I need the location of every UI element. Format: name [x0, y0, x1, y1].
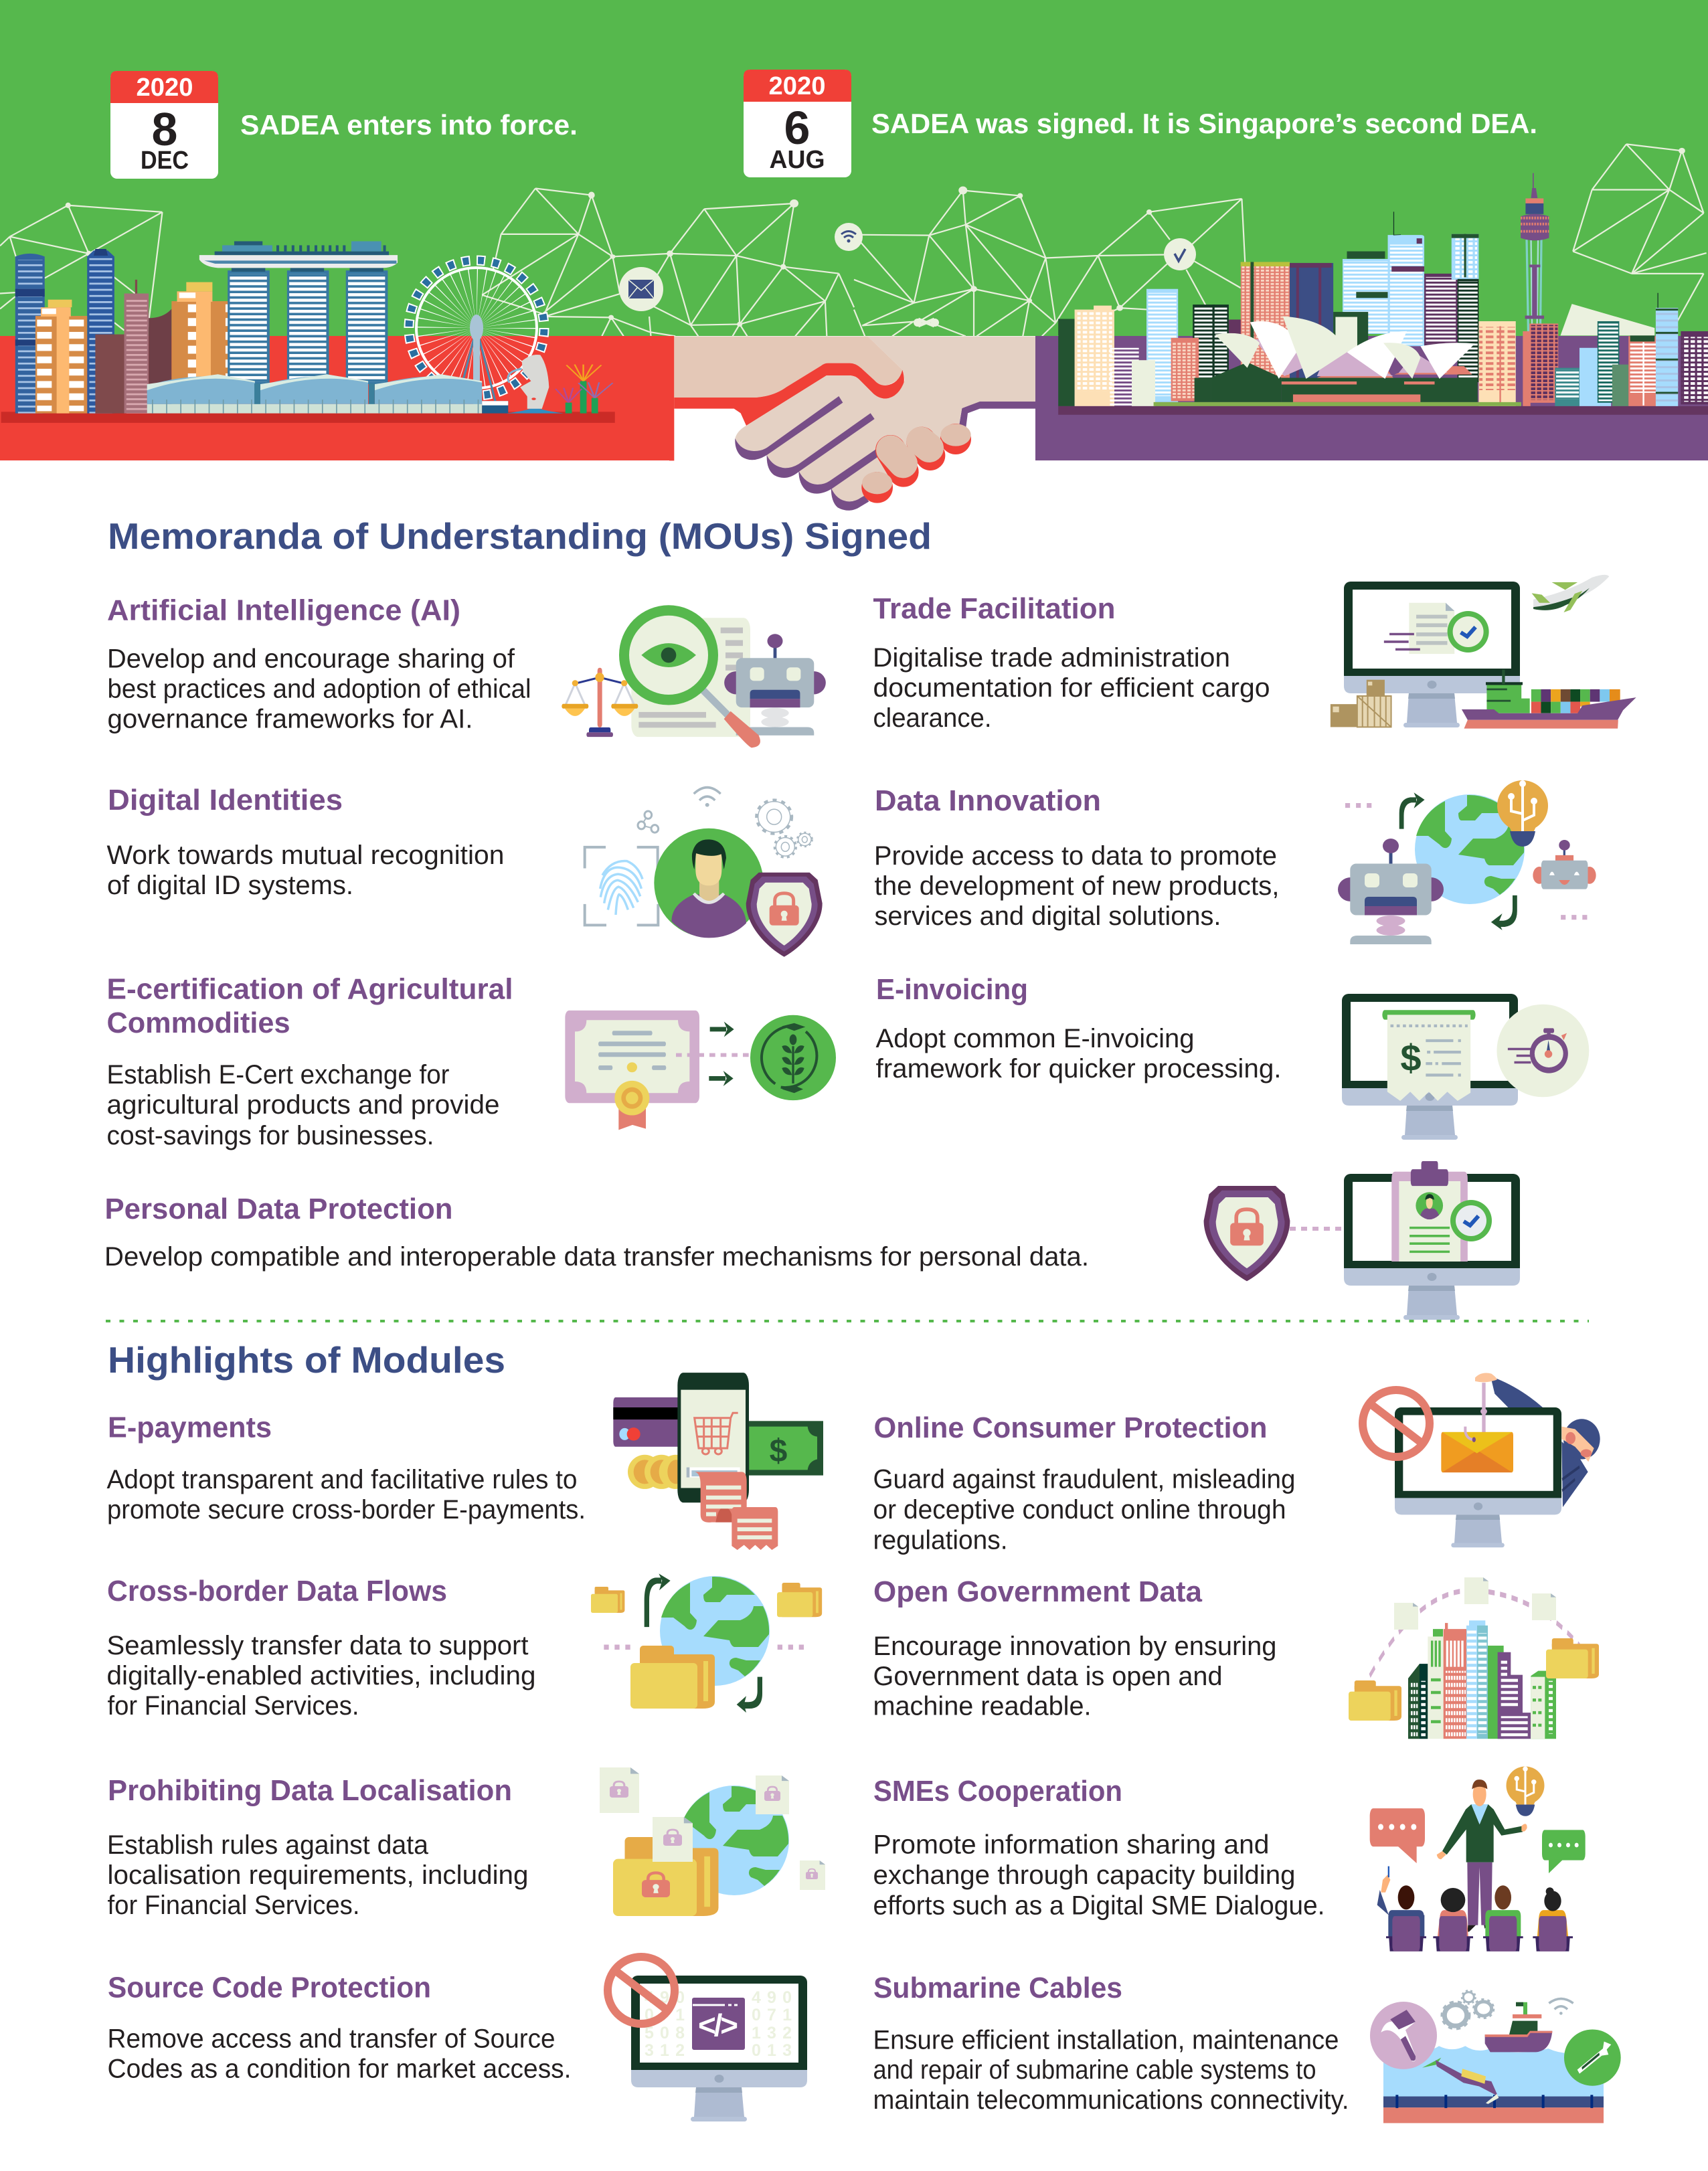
icon: scales, magnifier and robot: [562, 605, 826, 748]
panel: SMEs Cooperation: [873, 1767, 1586, 1951]
heading: [107, 973, 513, 1039]
calendar: 8 Dec 2020: DEC: [141, 147, 189, 175]
text block: Guard against fraudulent, misleading: [873, 1464, 1296, 1494]
text block: agricultural products and provide: [107, 1090, 499, 1120]
Skyline foreground: [147, 355, 613, 414]
faint digits: 1 3 2: [752, 2024, 792, 2043]
text block: services and digital solutions.: [874, 901, 1221, 931]
text block: Ensure efficient installation, maintenance: [873, 2025, 1339, 2055]
icon: mail bubble: [619, 267, 663, 311]
text block: efforts such as a Digital SME Dialogue.: [873, 1891, 1325, 1921]
text block: localisation requirements, including: [107, 1860, 529, 1890]
text block: cost-savings for businesses.: [107, 1121, 434, 1150]
text block: [107, 1465, 586, 1525]
heading: Personal Data Protection: [104, 1193, 452, 1225]
text block: Remove access and transfer of Source: [107, 2024, 556, 2053]
text block: documentation for efficient cargo: [873, 673, 1270, 703]
faint digits: 5 0 8: [645, 2024, 685, 2043]
text block: of digital ID systems.: [107, 871, 353, 900]
icon: city, folders and documents: [1349, 1577, 1599, 1739]
calendar: 8 Dec 2020: 8: [152, 103, 177, 155]
text block: for Financial Services.: [107, 1691, 359, 1721]
faint digits: 4 9 0: [752, 1988, 792, 2007]
panel: Source Code Protection: [107, 1957, 807, 2121]
calendar: 8 Dec 2020: [110, 71, 218, 179]
text block: [107, 644, 531, 733]
merlion: [507, 355, 564, 414]
purple Australia block: [1035, 336, 1708, 460]
icon: phishing envelope on monitor: [1363, 1373, 1600, 1547]
text block: for Financial Services.: [107, 1891, 360, 1920]
heading: Open Government Data: [873, 1576, 1203, 1608]
Sydney Opera House: [1154, 317, 1521, 406]
network nodes left: [66, 192, 798, 327]
text block: [107, 1060, 499, 1150]
icon: wifi bubble: [835, 223, 863, 251]
text block: promote secure cross-border E-payments.: [107, 1495, 586, 1525]
heading: Prohibiting Data Localisation: [108, 1775, 512, 1807]
text block: [107, 841, 505, 900]
heading: Submarine Cables: [873, 1972, 1122, 2004]
heading: Data Innovation: [875, 785, 1101, 817]
calendar: 6 Aug 2020: 2020: [768, 72, 826, 100]
heading: Cross-border Data Flows: [107, 1575, 447, 1608]
icon: presenter and audience: [1370, 1767, 1586, 1951]
icon: wrench node: [914, 319, 939, 327]
text block: Work towards mutual recognition: [107, 841, 505, 870]
faint digits: 0 7 1: [645, 2006, 685, 2024]
text block: Codes as a condition for market access.: [107, 2055, 572, 2084]
panel: Cross-border Data Flows: [107, 1573, 822, 1721]
orange tower right: [171, 282, 229, 406]
text block: Seamlessly transfer data to support: [107, 1631, 529, 1660]
text block: Digitalise trade administration: [873, 643, 1230, 673]
text block: Promote information sharing and: [873, 1830, 1269, 1859]
icon: monitor with code window and prohibition sign: [608, 1957, 807, 2121]
panel: Submarine Cables: [873, 1972, 1621, 2123]
Sydney Tower: [1521, 173, 1549, 333]
red Singapore block: [0, 336, 674, 460]
icon: monitor with code window and prohibition sign: </>: [698, 2008, 738, 2043]
dollar sign: $: [770, 1434, 788, 1469]
text block: [873, 643, 1270, 733]
header band: [0, 0, 1708, 460]
dollar sign: $: [1400, 1037, 1422, 1079]
faint digits: 0 7 1: [752, 2006, 792, 2024]
heading: Trade Facilitation: [873, 593, 1115, 625]
supertrees: [556, 365, 613, 414]
icon: robots, globe and bulb: [1338, 780, 1596, 944]
panel: Prohibiting Data Localisation: [107, 1767, 825, 1920]
text block: [873, 1632, 1277, 1721]
panel: E-certification: [107, 973, 836, 1150]
text block: Adopt transparent and facilitative rules to: [107, 1465, 577, 1494]
network lines right: [854, 144, 1707, 336]
milestone text 1: SADEA enters into force.: [240, 109, 578, 141]
text block: Government data is open and: [873, 1662, 1222, 1691]
heading: Online Consumer Protection: [874, 1412, 1268, 1444]
text block: [107, 2024, 572, 2084]
text block: machine readable.: [873, 1692, 1091, 1721]
heading: Highlights of Modules: Highlights of Modules: [108, 1339, 505, 1381]
text block: Adopt common E-invoicing: [875, 1024, 1194, 1053]
text block: Develop compatible and interoperable data transfer mechanisms for personal data.: [104, 1242, 1089, 1272]
Singapore Flyer: [409, 260, 544, 412]
text block: Establish rules against data: [107, 1830, 429, 1860]
text block: [107, 1830, 529, 1920]
text block: [873, 2025, 1349, 2115]
text block: the development of new products,: [874, 871, 1280, 901]
calendar: 6 Aug 2020: [744, 70, 851, 177]
heading: E-invoicing: [876, 974, 1028, 1006]
text block: framework for quicker processing.: [875, 1054, 1281, 1083]
text block: and repair of submarine cable systems to: [873, 2055, 1316, 2085]
text block: [107, 1631, 535, 1721]
heading: E-certification of Agricultural: [107, 973, 513, 1005]
Australia skyline: [1058, 173, 1708, 415]
faint digits: 4 9 0: [645, 1988, 685, 2007]
heading: Digital Identities: [108, 784, 343, 816]
text block: regulations.: [873, 1526, 1008, 1555]
text block: Develop and encourage sharing of: [107, 644, 515, 673]
calendar: 6 Aug 2020: 6: [784, 102, 810, 154]
text block: or deceptive conduct online through: [873, 1495, 1286, 1525]
icon: locked folder and documents: [600, 1767, 825, 1916]
orange tower left: [35, 300, 87, 414]
text block: governance frameworks for AI.: [107, 704, 473, 733]
icon: check bubble: [1164, 238, 1196, 270]
panel: Data Innovation: [874, 780, 1596, 944]
heading: E-payments: [108, 1412, 272, 1444]
city blocks: [1058, 211, 1708, 406]
icon: person, fingerprint and shield: [585, 788, 823, 957]
panel: Online Consumer Protection: [873, 1373, 1600, 1555]
icon: globe and folders: [591, 1573, 822, 1713]
faint digits: 0 1 3: [752, 2041, 792, 2060]
esplanade domes: [147, 374, 508, 414]
network lines left and centre: [0, 188, 854, 336]
panel: Open Government Data: [873, 1576, 1599, 1739]
icon: monitor, receipt and stopwatch: [1342, 994, 1589, 1140]
heading: SMEs Cooperation: [873, 1775, 1122, 1808]
milestone text 2: SADEA was signed. It is Singapore’s second DEA.: [871, 108, 1537, 139]
heading: Artificial Intelligence (AI): [107, 594, 460, 626]
panel: Digital Identities: [107, 784, 823, 957]
heading: Source Code Protection: [108, 1972, 431, 2004]
handshake: [669, 337, 1035, 511]
calendar: 6 Aug 2020: AUG: [770, 146, 825, 174]
blue tower: [15, 254, 45, 414]
Singapore skyline: [1, 241, 615, 423]
panel: E-payments: [107, 1373, 823, 1550]
icon: card, phone, cash and receipts: [613, 1373, 823, 1550]
icon: shield and clipboard monitor: [1204, 1161, 1520, 1320]
text block: [873, 1464, 1296, 1555]
icon: monitor, ship and plane: [1331, 575, 1636, 729]
text block: best practices and adoption of ethical: [107, 675, 531, 704]
text block: clearance.: [873, 703, 992, 733]
text block: [875, 1024, 1281, 1083]
text block: Provide access to data to promote: [874, 841, 1277, 871]
panel: Artificial Intelligence: [107, 594, 826, 748]
icon: certificate and plant seal: [565, 1011, 836, 1130]
panel: Personal Data Protection: [104, 1161, 1520, 1320]
Marina Bay Sands: [199, 241, 398, 384]
brown towers: [95, 280, 171, 414]
icon: ship, diver and seabed cable: [1370, 1991, 1621, 2123]
panel: Trade Facilitation: [873, 575, 1636, 733]
text block: [874, 841, 1280, 931]
text block: [873, 1830, 1325, 1921]
heading: Memoranda of Understanding: Memoranda of Understanding (MOUs) Signed: [108, 515, 932, 557]
text block: exchange through capacity building: [873, 1860, 1296, 1890]
heading: Commodities: [107, 1007, 290, 1039]
faint digits: 3 1 2: [645, 2041, 685, 2060]
faint digits: [645, 1988, 792, 2060]
second blue tower: [87, 249, 114, 414]
text block: Establish E-Cert exchange for: [107, 1060, 450, 1090]
calendar: 8 Dec 2020: 2020: [137, 74, 193, 102]
triangle roof: [1560, 304, 1654, 335]
text block: Encourage innovation by ensuring: [873, 1632, 1277, 1661]
text block: maintain telecommunications connectivity.: [873, 2085, 1349, 2115]
panel: E-invoicing: [875, 974, 1589, 1140]
text block: digitally-enabled activities, including: [107, 1661, 535, 1690]
